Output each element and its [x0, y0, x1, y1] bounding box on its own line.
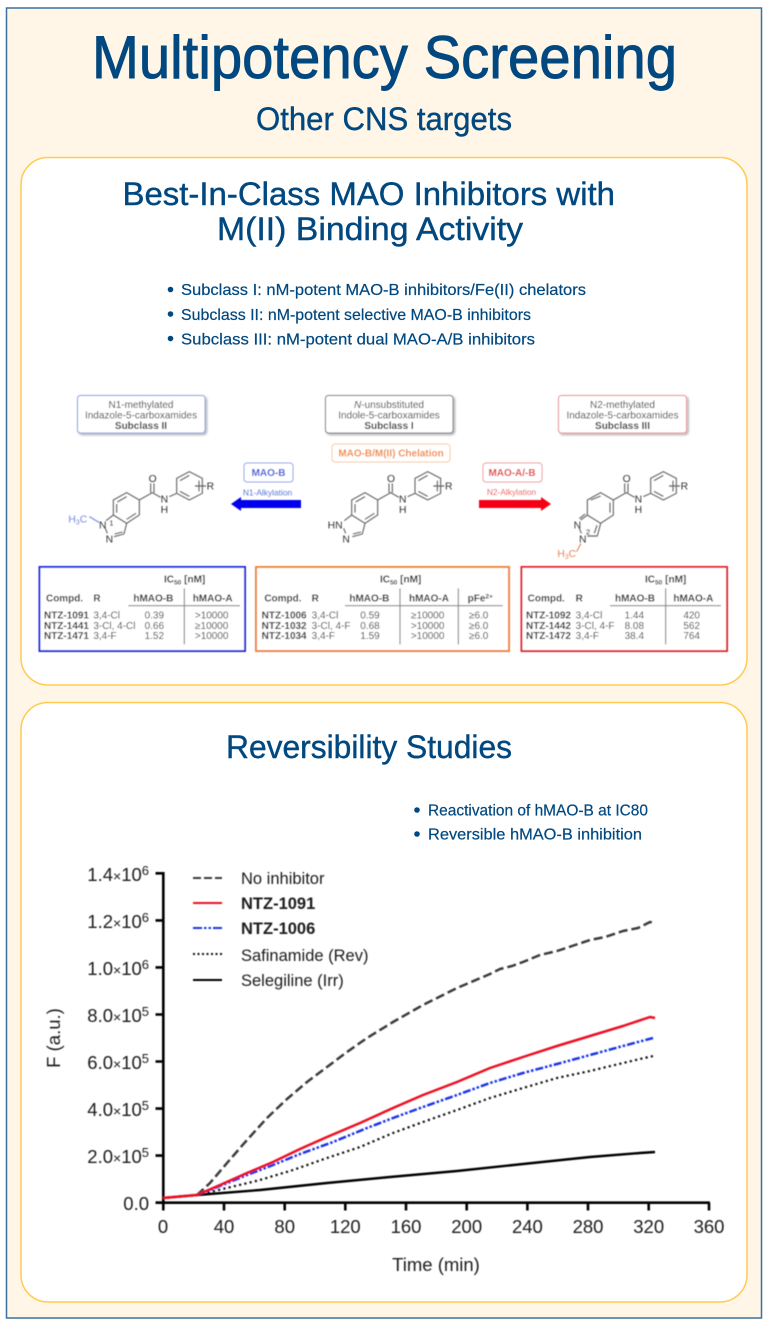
table: subclass I: IC [380, 574, 390, 585]
table: subclass I: 0.59 [360, 610, 380, 621]
y axis: 5 [142, 1098, 149, 1113]
table: subclass II: R [93, 594, 101, 605]
legend: Safinamide (Rev) [241, 947, 368, 965]
molecule: N2-methyl indazole: O [623, 474, 631, 485]
table: subclass I: NTZ-1032 [262, 621, 307, 632]
x axis title: Time (min) [392, 1254, 480, 1275]
table: subclass I: 3,4-F [312, 631, 335, 642]
table: subclass III: NTZ-1092 [526, 610, 571, 621]
x axis: 320 [633, 1216, 664, 1237]
y axis: 1.2×10 [87, 911, 142, 932]
table: subclass I: >10000 [411, 631, 445, 642]
table: subclass I: hMAO-A [409, 594, 449, 605]
table: subclass II: hMAO-A [193, 594, 233, 605]
table: subclass I: NTZ-1034 [262, 631, 307, 642]
molecule: N1-methyl indazole: R [207, 482, 214, 493]
y axis: 0.0 [123, 1193, 149, 1214]
y axis: 5 [142, 1004, 149, 1019]
label: subclass III: Indazole-5-carboxamides [566, 410, 679, 422]
table: subclass II: >10000 [195, 610, 229, 621]
table: subclass II: 3,4-F [93, 631, 117, 642]
molecule: N2-methyl indazole: N [579, 535, 586, 546]
table: subclass III: R [576, 594, 583, 605]
table: subclass III: [nM] [662, 574, 686, 585]
label: subclass II: Subclass II [115, 421, 167, 432]
subclass bullet list: Subclass III: nM-potent dual MAO-A/B inhibitors [181, 332, 535, 348]
y axis: 6 [142, 957, 149, 972]
table: subclass I: 3-Cl, 4-F [312, 621, 351, 632]
y axis: 8.0×10 [87, 1005, 142, 1026]
molecule: N1-methyl indazole: N [161, 495, 168, 506]
table: subclass II: Compd. [46, 594, 83, 605]
table: subclass III: 1.44 [625, 610, 644, 621]
table: subclass III: 3,4-Cl [576, 610, 602, 621]
series: NTZ-1091 [163, 1017, 655, 1198]
molecule: N2-methyl indazole: 2 [586, 528, 590, 537]
chip: MAO-B with N1-alkylation: MAO-B [252, 468, 285, 479]
chip: MAO-B with N1-alkylation [243, 463, 293, 498]
label: subclass I: Indole-5-carboxamides [338, 410, 440, 422]
molecule: N2-methyl indazole [557, 472, 688, 561]
chip: MAO-A/-B with N2-alkylation: MAO-A/-B [488, 468, 536, 479]
title: Multipotency Screening [92, 24, 677, 91]
legend: Selegiline (Irr) [241, 972, 344, 990]
y axis title: F (a.u.) [43, 1008, 64, 1068]
chip: MAO-B/M(II) chelation: MAO-B/M(II) Chelation [338, 448, 444, 460]
table: subclass I: >10000 [411, 621, 445, 632]
x axis: 160 [391, 1216, 421, 1237]
reversibility bullet list [414, 802, 648, 844]
table: subclass I: ≥6.0 [469, 610, 489, 621]
table: subclass II: 3,4-Cl [93, 610, 120, 621]
molecule: N1-methyl indazole: H [68, 515, 76, 526]
panel: reversibility studies [21, 702, 747, 1302]
arrow: to subclass III [479, 497, 551, 511]
table: subclass I: [nM] [397, 574, 421, 585]
x axis: 240 [512, 1216, 543, 1237]
series: No inhibitor [197, 922, 655, 1195]
label: subclass III: Subclass III [595, 421, 650, 432]
arrow: to subclass II [231, 497, 301, 511]
table: subclass II: 3-Cl, 4-Cl [93, 621, 136, 632]
chip: MAO-B/M(II) chelation [332, 444, 450, 462]
molecule: indole core: H [399, 505, 406, 516]
subclass bullet list: Subclass I: nM-potent MAO-B inhibitors/Fe(II) chelators [181, 282, 586, 299]
table: subclass III [522, 567, 727, 651]
molecule: N2-methyl indazole: C [569, 549, 577, 560]
table: subclass II: NTZ-1441 [44, 621, 89, 632]
x axis: 120 [330, 1216, 361, 1237]
table: subclass I: pFe [468, 594, 485, 605]
table: subclass III: 562 [683, 621, 700, 632]
panel: MAO inhibitors [21, 158, 747, 685]
table: subclass I: ≥6.0 [469, 631, 489, 642]
table: subclass III: 38.4 [625, 631, 644, 642]
molecule: N2-methyl indazole: N [574, 521, 581, 532]
table: subclass III: Compd. [528, 594, 565, 605]
molecule: indole core: O [387, 474, 395, 485]
reversibility bullet list: Reactivation of hMAO-B at IC80 [428, 802, 648, 820]
molecule: N2-methyl indazole: H [635, 505, 642, 516]
molecule: N2-methyl indazole: N [635, 495, 642, 506]
table: subclass III: hMAO-B [615, 594, 655, 605]
table: subclass II: 0.39 [145, 610, 164, 621]
chemistry scheme [40, 396, 727, 651]
molecule: indole core: N [399, 495, 406, 506]
panel heading: Reversibility Studies [226, 729, 512, 765]
table: subclass I: 1.59 [360, 631, 380, 642]
table: subclass I: ≥6.0 [469, 621, 489, 632]
molecule: N2-methyl indazole: H [557, 549, 565, 560]
subclass bullet list [168, 282, 586, 348]
molecule: N2-methyl indazole: R [681, 482, 688, 493]
table: subclass III: 3,4-F [576, 631, 599, 642]
y axis: 4.0×10 [87, 1099, 142, 1120]
x axis [156, 1203, 724, 1237]
y axis: 6 [142, 910, 149, 925]
molecule: indole core: N [342, 534, 350, 545]
molecule: N1-methyl indazole: 1 [109, 519, 113, 528]
molecule: N1-methyl indazole: N [99, 520, 106, 531]
table: subclass I: Compd. [264, 594, 302, 605]
x axis: 280 [573, 1216, 603, 1237]
molecule: indole core [328, 472, 452, 545]
table: subclass III: 3-Cl, 4-F [576, 621, 615, 632]
y axis [87, 863, 163, 1214]
molecule: N1-methyl indazole: N [106, 534, 113, 545]
label: subclass I [326, 396, 453, 433]
chip: MAO-A/-B with N2-alkylation [483, 463, 542, 497]
legend: NTZ-1006 [241, 920, 315, 938]
legend: No inhibitor [241, 870, 325, 888]
panel heading [122, 176, 615, 247]
y axis: 6 [142, 863, 149, 878]
table: subclass I: R [312, 594, 319, 605]
x axis: 0 [158, 1216, 168, 1237]
y axis: 5 [142, 1051, 149, 1066]
table: subclass I: ≥10000 [411, 610, 445, 621]
label: subclass II: N1-methylated [109, 400, 173, 411]
legend [193, 870, 368, 990]
x axis: 40 [214, 1216, 234, 1237]
series: Selegiline [163, 1152, 655, 1198]
y axis: 6.0×10 [87, 1052, 142, 1073]
label: subclass III: N2-methylated [590, 400, 655, 411]
subtitle: Other CNS targets [256, 101, 512, 137]
molecule: N1-methyl indazole [68, 472, 214, 545]
x axis: 360 [694, 1216, 724, 1237]
line chart [43, 863, 724, 1275]
table: subclass III: NTZ-1442 [526, 621, 571, 632]
molecule: N1-methyl indazole: C [80, 515, 88, 526]
panel heading: Best-In-Class MAO Inhibitors with [122, 176, 615, 212]
table: subclass II: >10000 [195, 631, 229, 642]
table: subclass II: IC [164, 574, 174, 585]
table: subclass I [256, 567, 509, 651]
table: subclass II: [nM] [181, 574, 205, 585]
table: subclass I: 0.68 [360, 621, 380, 632]
series: NTZ-1006 [197, 1038, 653, 1195]
molecule: N2-methyl indazole: 3 [565, 554, 569, 561]
series: Safinamide [197, 1056, 653, 1195]
y axis: 1.0×10 [87, 958, 142, 979]
table: subclass I: hMAO-B [349, 594, 389, 605]
y axis: 2.0×10 [87, 1146, 142, 1167]
table: subclass II: 0.66 [145, 621, 164, 632]
table: subclass II: hMAO-B [133, 594, 173, 605]
table: subclass III: 8.08 [625, 621, 644, 632]
label: subclass I: N-unsubstituted [354, 400, 424, 411]
chip: MAO-B with N1-alkylation: N1-Alkylation [243, 488, 293, 498]
molecule: N1-methyl indazole: H [161, 505, 168, 516]
table: subclass I: NTZ-1006 [262, 610, 307, 621]
molecule: N1-methyl indazole: 3 [76, 520, 80, 527]
table: subclass II: 1.52 [145, 631, 164, 642]
molecule: N1-methyl indazole: O [149, 474, 157, 485]
table: subclass III: 764 [683, 631, 700, 642]
table: subclass III: IC [645, 574, 655, 585]
table: subclass I: 2+ [485, 594, 493, 601]
y axis: 1.4×10 [87, 864, 142, 885]
panel heading: M(II) Binding Activity [217, 211, 523, 247]
reversibility bullet list: Reversible hMAO-B inhibition [428, 826, 642, 844]
legend: NTZ-1091 [241, 895, 315, 913]
molecule: indole core: HN [328, 520, 343, 531]
table: subclass I: 3,4-Cl [312, 610, 338, 621]
table: subclass III: 420 [683, 610, 700, 621]
table: subclass II: 50 [174, 580, 182, 587]
table: subclass III: NTZ-1472 [526, 631, 571, 642]
table: subclass III: 50 [655, 580, 663, 587]
label: subclass I: Subclass I [364, 421, 414, 432]
table: subclass II [40, 567, 245, 651]
subclass bullet list: Subclass II: nM-potent selective MAO-B inhibitors [181, 307, 531, 324]
label: subclass II: Indazole-5-carboxamides [85, 410, 197, 422]
x axis: 200 [451, 1216, 482, 1237]
table: subclass II: NTZ-1471 [44, 631, 89, 642]
x axis: 80 [274, 1216, 295, 1237]
y axis: 5 [142, 1145, 149, 1160]
table: subclass II: ≥10000 [195, 621, 229, 632]
table: subclass I: 50 [390, 580, 398, 587]
label: subclass II [78, 396, 205, 433]
chip: MAO-A/-B with N2-alkylation: N2-Alkylation [487, 487, 537, 497]
table: subclass III: hMAO-A [673, 594, 713, 605]
table: subclass II: NTZ-1091 [44, 610, 89, 621]
molecule: indole core: R [445, 482, 452, 493]
label: subclass III [558, 396, 686, 433]
